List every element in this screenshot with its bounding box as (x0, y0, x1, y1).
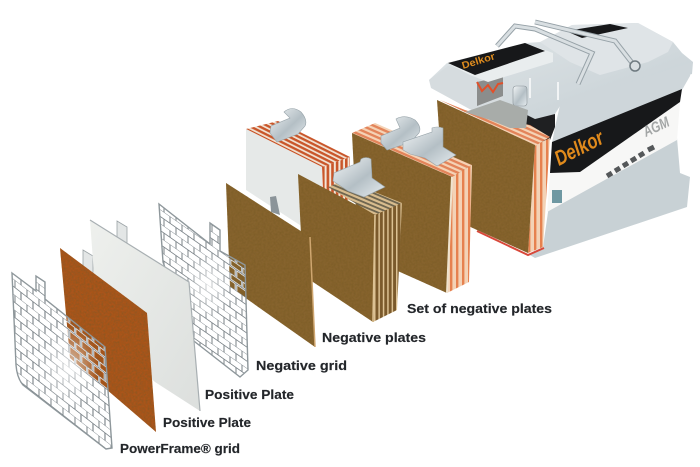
plate edge (310, 237, 315, 347)
stack side (322, 157, 350, 215)
negative plate single (226, 183, 315, 347)
label: negative grid: Negative grid (256, 358, 347, 373)
left lid top (447, 43, 553, 82)
stack front (298, 174, 375, 322)
second lid black label (566, 24, 628, 38)
label: negative plates: Negative plates (322, 330, 426, 345)
grid highlight (184, 249, 232, 321)
white separator stack (246, 108, 350, 240)
grid mesh (159, 204, 248, 377)
terminal post (513, 86, 527, 106)
stack front edge (373, 215, 375, 322)
plate face (90, 220, 200, 411)
battery: cutaway Delkor AGM (429, 22, 693, 258)
plate edge (90, 220, 200, 411)
AGM logo: AGM (640, 114, 673, 141)
battery front top band (552, 62, 693, 143)
carrying handle highlight (497, 26, 592, 84)
stack top (328, 180, 402, 215)
plate tab (270, 196, 280, 215)
set side (447, 165, 472, 293)
left lid black label (448, 43, 545, 75)
stack lug (333, 158, 385, 197)
grid mesh (12, 273, 112, 449)
label small blue box (552, 190, 562, 203)
carrying handle (497, 26, 592, 84)
lug right with post (403, 127, 456, 166)
Delkor side logo: Delkor (551, 126, 609, 170)
plate tabs (83, 221, 127, 280)
lid step (530, 78, 558, 100)
stack white face (246, 129, 323, 240)
label: PowerFrame grid: PowerFrame® grid (120, 441, 240, 456)
battery silhouette top surface (429, 23, 693, 119)
grid highlight (38, 326, 98, 410)
negative grid (159, 204, 248, 377)
lug left (381, 117, 420, 150)
battery black label band (550, 89, 682, 173)
cutaway dark cavity (490, 104, 555, 145)
cut plate side (528, 138, 550, 253)
set front (352, 133, 452, 293)
set of negative plates (352, 117, 472, 293)
set front edge (447, 177, 452, 293)
negative plates stack (298, 158, 402, 322)
stack lug (270, 108, 306, 142)
PowerFrame grid (12, 273, 112, 449)
battery label white area (547, 102, 680, 212)
set top (352, 123, 472, 177)
label: set of negative plates: Set of negative plates (407, 301, 552, 316)
Delkor lid logo: Delkor (461, 51, 497, 72)
stack side (373, 203, 402, 322)
plate face (226, 183, 315, 347)
second handle (535, 22, 636, 68)
cut red seal (477, 82, 503, 92)
second handle highlight (535, 22, 636, 68)
label: positive plate lower: Positive Plate (163, 415, 251, 430)
stack top (246, 121, 350, 167)
cut plate front (437, 100, 535, 253)
left lid front (429, 66, 503, 112)
label: positive plate upper: Positive Plate (205, 387, 294, 402)
internal lug (465, 100, 528, 128)
battery front lower body (528, 138, 690, 258)
cut terminal internals (477, 76, 503, 106)
second lid (540, 23, 673, 75)
handle pivot (630, 61, 640, 71)
cut case red bottom line (477, 231, 544, 255)
label icon row (607, 147, 654, 176)
upper positive plate, white (83, 220, 200, 411)
cut plate top (440, 100, 550, 146)
lower positive plate, orange (60, 248, 156, 432)
